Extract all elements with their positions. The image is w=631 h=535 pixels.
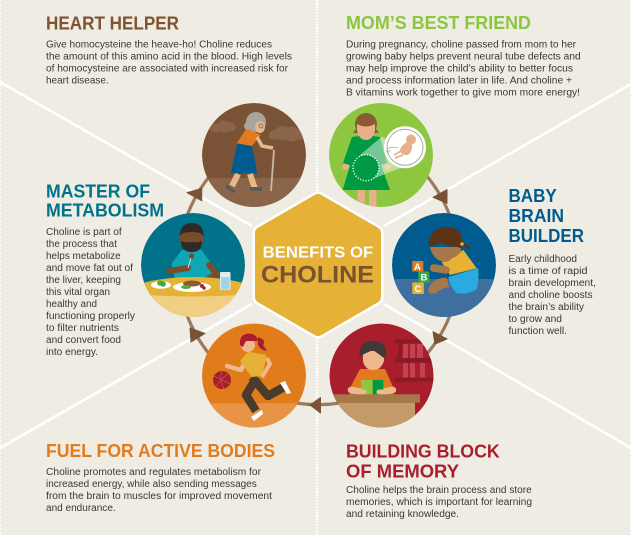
icon: man eating a meal bbox=[141, 213, 245, 317]
section: fuel for active bodies: Choline promotes and regulates metabolism for bbox=[46, 467, 262, 478]
section: master of metabolism: healthy and bbox=[46, 299, 97, 310]
icon: boy reading at desk bbox=[330, 324, 435, 431]
section: fuel for active bodies: FUEL FOR ACTIVE BODIES bbox=[46, 441, 275, 461]
section: heart helper: heart disease. bbox=[46, 76, 109, 86]
hexagon title: BENEFITS OF bbox=[263, 245, 373, 262]
womb inset bbox=[384, 126, 426, 168]
section: master of metabolism: the process that bbox=[46, 239, 117, 250]
section: baby brain builder: BUILDER bbox=[508, 226, 584, 246]
cycle arrows bbox=[184, 175, 452, 413]
section: fuel for active bodies: increased energy, while also sending messages bbox=[46, 479, 257, 490]
section: building block of memory: OF MEMORY bbox=[346, 461, 459, 481]
section: heart helper: the amount of this amino acid in the blood. High levels bbox=[46, 52, 292, 62]
section: mom's best friend: may help improve the child’s ability to better focus bbox=[346, 63, 573, 74]
icon: girl dribbling basketball bbox=[200, 324, 310, 431]
section: heart helper bbox=[46, 13, 292, 86]
section: baby brain builder: to grow and bbox=[508, 314, 562, 325]
section: master of metabolism: MASTER OF bbox=[46, 181, 150, 201]
section: building block of memory: memories, which is important for learning bbox=[346, 497, 532, 508]
section: master of metabolism: helps metabolize bbox=[46, 251, 121, 262]
icon: elderly woman walking bbox=[200, 103, 308, 210]
icon: baby with blocks: B bbox=[420, 272, 428, 284]
section: master of metabolism: Choline is part of bbox=[46, 227, 122, 238]
hexagon title: CHOLINE bbox=[261, 262, 374, 289]
section: master of metabolism: into energy. bbox=[46, 347, 98, 358]
section: heart helper: of homocysteine are associated with increased risk for bbox=[46, 64, 289, 74]
section: master of metabolism: this vital organ bbox=[46, 287, 110, 298]
section: master of metabolism: METABOLISM bbox=[46, 201, 164, 221]
section: mom's best friend bbox=[346, 13, 581, 98]
section: fuel for active bodies bbox=[46, 441, 275, 514]
section: baby brain builder: BRAIN bbox=[508, 206, 564, 226]
section: baby brain builder: the brain’s ability bbox=[508, 302, 584, 313]
section: baby brain builder: is a time of rapid bbox=[508, 266, 588, 277]
section: mom's best friend: During pregnancy, choline passed from mom to her bbox=[346, 39, 577, 50]
section: master of metabolism: to filter nutrients bbox=[46, 323, 119, 334]
icon: baby with blocks bbox=[390, 213, 500, 319]
section: baby brain builder: brain development, bbox=[508, 278, 596, 289]
hexagon title bbox=[261, 245, 374, 289]
icon: baby with blocks: A bbox=[414, 262, 421, 273]
section: master of metabolism: and move fat out of bbox=[46, 263, 133, 274]
center hexagon bbox=[261, 200, 375, 330]
section: baby brain builder: BABY bbox=[508, 186, 557, 206]
icon: baby with blocks: C bbox=[414, 284, 422, 295]
section: mom's best friend: growing baby helps prevent neural tube defects and bbox=[346, 51, 581, 62]
icon: pregnant mother bbox=[329, 103, 433, 210]
section: building block of memory: Choline helps the brain process and store bbox=[346, 485, 532, 496]
section: building block of memory: BUILDING BLOCK bbox=[346, 442, 500, 462]
section: master of metabolism bbox=[46, 181, 164, 358]
section: mom's best friend: and process information later in life. And choline + bbox=[346, 75, 572, 86]
section: heart helper: HEART HELPER bbox=[46, 13, 179, 33]
section: fuel for active bodies: and endurance. bbox=[46, 503, 116, 514]
section: baby brain builder: function well. bbox=[508, 326, 567, 337]
section: fuel for active bodies: from the brain to muscles for improved movement bbox=[46, 491, 272, 502]
section: master of metabolism: the liver, keeping bbox=[46, 275, 121, 286]
section: mom's best friend: MOM’S BEST FRIEND bbox=[346, 13, 531, 33]
section: heart helper: Give homocysteine the heave-ho! Choline reduces bbox=[46, 40, 272, 50]
section: master of metabolism: and convert food bbox=[46, 335, 121, 346]
section: baby brain builder: Early childhood bbox=[508, 254, 577, 265]
section: building block of memory bbox=[346, 442, 532, 520]
section: baby brain builder: and choline boosts bbox=[508, 290, 592, 301]
section: master of metabolism: functioning properly bbox=[46, 311, 135, 322]
section: building block of memory: and retaining knowledge. bbox=[346, 509, 459, 520]
section: mom's best friend: B vitamins work together to give mom more energy! bbox=[346, 87, 580, 98]
section: baby brain builder bbox=[508, 186, 596, 337]
